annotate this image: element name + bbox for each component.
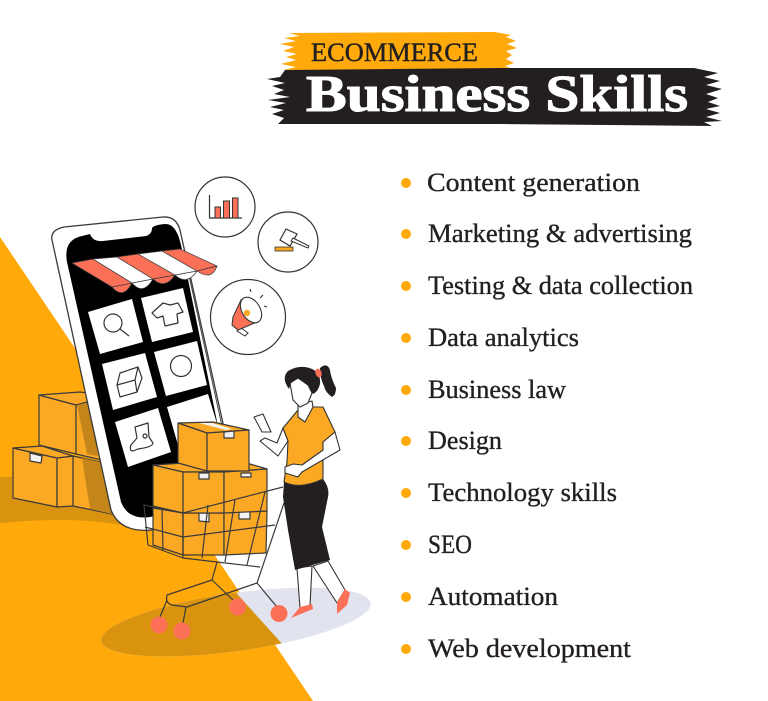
title brush: orange [280, 32, 517, 70]
list item: Data analytics: Data analytics [428, 323, 579, 352]
icon: package [117, 367, 142, 397]
list item: SEO [401, 530, 472, 559]
hair [285, 367, 320, 394]
icon: gavel circle [258, 212, 318, 272]
held phone [254, 414, 271, 432]
awning [72, 249, 217, 293]
skills list [401, 168, 693, 663]
title brush: dark [267, 68, 722, 126]
title: Business Skills: Business Skills [306, 66, 688, 123]
list item: Automation: Automation [428, 582, 558, 611]
woman [254, 365, 350, 618]
shopping cart [144, 487, 284, 623]
title: ECOMMERCE: ECOMMERCE [311, 38, 478, 67]
near arm [260, 428, 288, 456]
list item: Testing & data collection: Testing & data collection [428, 271, 693, 300]
list item: Business law: Business law [428, 375, 566, 404]
icon: search [104, 314, 129, 336]
icon: circle [170, 356, 192, 376]
phone inner edge line [186, 262, 236, 490]
shadow behind boxes [0, 476, 150, 532]
icon: bar chart circle [195, 177, 255, 237]
icon: megaphone circle [210, 280, 286, 354]
phone screen [66, 224, 233, 517]
skirt [283, 479, 330, 570]
face [290, 378, 312, 407]
list item: Marketing & advertising: Marketing & advertising [428, 219, 692, 248]
back stacked boxes [13, 392, 112, 514]
legs [297, 566, 312, 608]
cart wheels [150, 598, 288, 640]
phone body [52, 217, 240, 530]
list item: Web development: Web development [428, 634, 632, 663]
list item: Technology skills: Technology skills [428, 478, 617, 507]
cart ground shadow [101, 588, 371, 656]
icon: t-shirt [152, 303, 183, 326]
ponytail [320, 365, 336, 397]
far arm [285, 432, 340, 477]
app tiles [88, 288, 222, 467]
neck [298, 401, 313, 422]
top [283, 407, 335, 485]
shoes [291, 604, 313, 618]
hair tie [314, 368, 323, 378]
cart boxes [153, 422, 267, 555]
phone [52, 217, 240, 530]
list item: Design: Design [428, 426, 502, 455]
list item: Content generation: Content generation [427, 168, 640, 197]
list item: SEO: SEO [428, 530, 472, 559]
icon: sneaker [130, 423, 153, 451]
background orange triangle [0, 237, 313, 701]
